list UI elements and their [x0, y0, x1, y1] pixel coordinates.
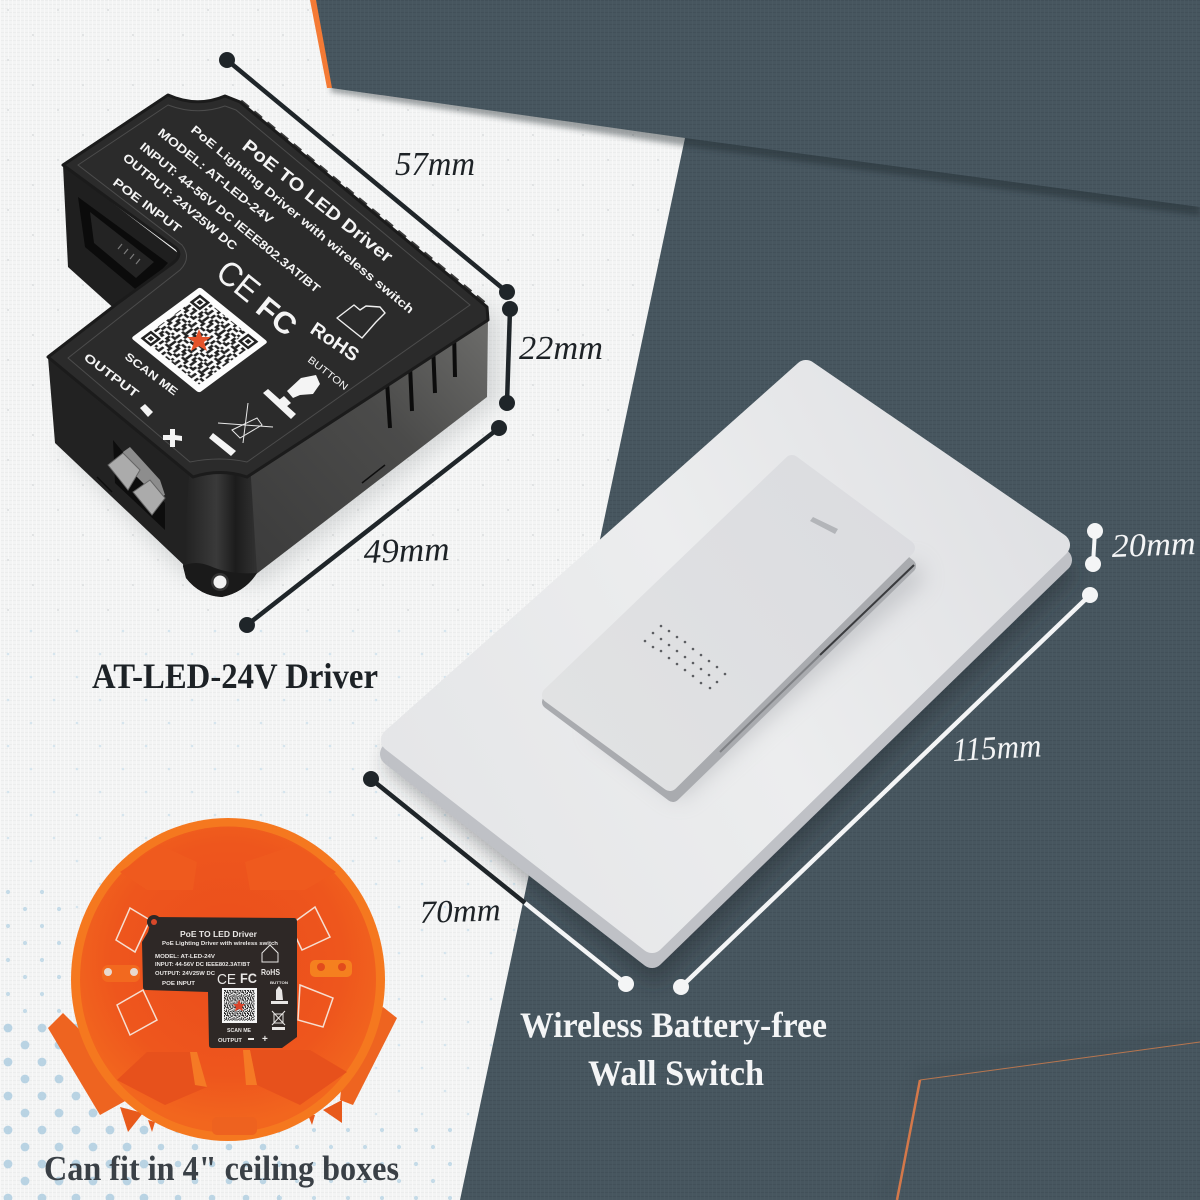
box inner	[80, 826, 376, 1132]
label text: INPUT: 44-56V DC IEEE802.3AT/BT	[137, 139, 324, 296]
product: wall plate and switch	[385, 372, 1080, 985]
label text: PoE TO LED Driver	[239, 135, 397, 267]
left port block side	[63, 165, 178, 312]
small driver text: RoHS	[261, 967, 280, 977]
label text: FC	[250, 291, 303, 343]
small driver text: +	[262, 1034, 268, 1045]
label text: POE INPUT	[110, 175, 185, 236]
knockout slots	[116, 907, 333, 1035]
top edge serration	[82, 102, 485, 340]
wire connector	[108, 440, 165, 530]
lower right panel with orange edge	[880, 1030, 1200, 1200]
dimension: 115mm	[673, 587, 1098, 995]
caption: ceiling boxes: Can fit in 4" ceiling boxes	[44, 1149, 399, 1188]
upper dark panel with orange edge	[310, 0, 1200, 216]
switch face	[550, 463, 907, 783]
caption: wireless switch: Wireless Battery-free	[520, 1005, 827, 1045]
small button icon	[271, 986, 288, 1004]
label text: BUTTON	[305, 355, 350, 393]
dimension: 57mm: 57mm	[395, 146, 475, 183]
LED indicator	[810, 517, 838, 534]
dimension: 70mm	[363, 771, 634, 992]
switch gap	[720, 565, 914, 752]
slit marks	[97, 465, 385, 492]
plate face	[393, 372, 1058, 941]
small driver module	[142, 915, 297, 1048]
front left face	[48, 357, 193, 568]
device shadow	[60, 300, 500, 585]
mounting ears	[102, 960, 352, 982]
label text: SCAN ME	[122, 351, 180, 398]
plate shadow	[385, 560, 1080, 985]
caption: driver: AT-LED-24V Driver	[92, 656, 378, 696]
small driver text: CE	[217, 971, 236, 988]
top face	[48, 95, 488, 477]
dimension: 22mm: 22mm	[519, 330, 603, 367]
small driver text	[155, 930, 288, 1045]
plate side	[392, 386, 1060, 956]
product: orange ceiling box	[48, 818, 397, 1141]
small driver text: BUTTON	[270, 980, 288, 985]
right side face	[247, 318, 488, 575]
product: PoE to LED driver	[48, 95, 500, 597]
dimension: 20mm: 20mm	[1111, 526, 1196, 565]
small driver text: MODEL: AT-LED-24V	[155, 954, 215, 960]
label text: CE	[209, 253, 267, 310]
label text: OUTPUT: 24V25W DC	[120, 151, 240, 253]
icon: crossed-out bin	[218, 403, 273, 443]
dimension: 49mm: 49mm	[363, 531, 450, 571]
icon: bar	[209, 433, 236, 456]
RJ45 port	[78, 197, 168, 293]
small QR	[222, 988, 257, 1023]
switch shadow	[590, 560, 925, 800]
box side wings	[48, 1007, 397, 1115]
dimension: 57mm	[219, 52, 515, 300]
QR star	[187, 329, 211, 351]
small driver text: PoE Lighting Driver with wireless switch	[162, 941, 279, 947]
box outer ring	[71, 818, 385, 1141]
label text: OUTPUT	[81, 350, 142, 401]
switch back plate	[549, 472, 909, 795]
vents	[387, 330, 455, 428]
dimension: 22mm	[499, 301, 603, 411]
icon: house	[337, 305, 385, 338]
small driver text: POE INPUT	[162, 981, 196, 987]
small driver text: SCAN ME	[227, 1028, 252, 1034]
small driver text: PoE TO LED Driver	[180, 930, 257, 939]
caption: wireless switch: Wall Switch	[588, 1053, 764, 1093]
dimension: 115mm: 115mm	[952, 728, 1042, 769]
mounting tab and column	[183, 462, 257, 597]
QR code	[131, 287, 268, 393]
polarity marks	[140, 404, 182, 447]
icon: button with hand	[263, 375, 320, 419]
inner label outline	[68, 105, 470, 462]
small driver text: INPUT: 44-56V DC IEEE802.3AT/BT	[155, 962, 251, 968]
small driver text: OUTPUT: 24V25W DC	[155, 971, 215, 977]
label text: RoHS	[306, 319, 363, 366]
inner wall faces	[117, 845, 347, 1135]
speaker dots	[644, 625, 726, 689]
small house icon	[262, 945, 278, 962]
small driver text: OUTPUT	[218, 1038, 243, 1044]
small driver text: FC	[240, 970, 257, 986]
dimension: 49mm	[239, 420, 507, 633]
small bin icon	[272, 1011, 285, 1025]
caption: wireless switch	[520, 1005, 827, 1093]
dimension: 70mm: 70mm	[419, 891, 501, 930]
dark background panel	[460, 125, 1200, 1200]
label text: PoE Lighting Driver with wireless switch	[188, 123, 417, 316]
box bottom teeth	[120, 1100, 342, 1132]
label text: MODEL: AT-LED-24V	[155, 125, 276, 227]
label text	[81, 123, 417, 401]
background dots	[0, 0, 700, 1200]
dimension: 20mm	[1085, 523, 1196, 572]
